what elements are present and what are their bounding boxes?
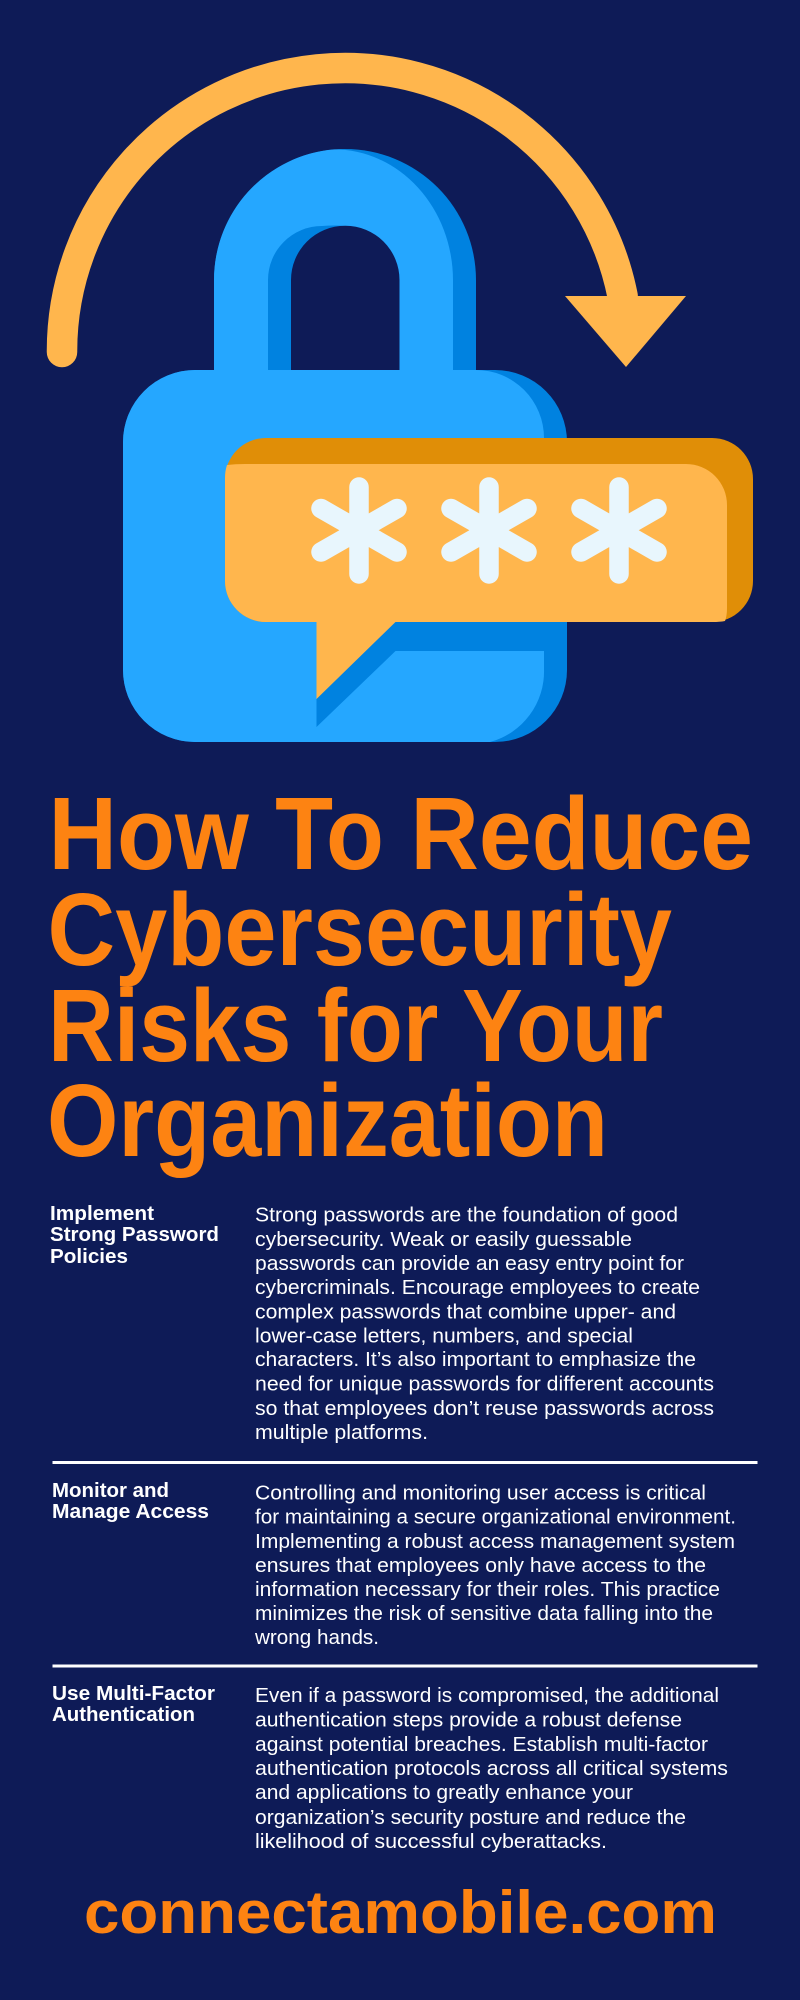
text block: multi-factor authentication: organization’s security posture and reduce the [255, 1806, 686, 1829]
text block: strong passwords: need for unique passwords for different accounts [255, 1373, 714, 1396]
text block: multi-factor authentication: and applications to greatly enhance your [255, 1781, 633, 1804]
heading: implement strong password policies: Strong Password [50, 1224, 219, 1246]
footer website: connectamobile.com [84, 1879, 717, 1946]
text block: controlling access [254, 1482, 736, 1649]
text block: multi-factor authentication: likelihood of successful cyberattacks. [255, 1830, 607, 1853]
text block: controlling access: ensures that employees only have access to the [255, 1554, 706, 1577]
text block: controlling access: Controlling and monitoring user access is critical [255, 1482, 706, 1505]
icon: password speech bubble [225, 438, 753, 699]
heading: implement strong password policies [50, 1203, 219, 1268]
text block: strong passwords: characters. It’s also important to emphasize the [255, 1348, 696, 1371]
text block: strong passwords: so that employees don’t reuse passwords across [255, 1397, 714, 1420]
text block: controlling access: Implementing a robust access management system [255, 1530, 735, 1553]
icon: padlock shackle [214, 149, 476, 372]
text block: strong passwords: cybercriminals. Encourage employees to create [255, 1276, 700, 1299]
text block: multi-factor authentication: authentication protocols across all critical systems [255, 1757, 728, 1780]
title [47, 776, 753, 1178]
text block: strong passwords: passwords can provide an easy entry point for [255, 1252, 684, 1275]
heading: use multi-factor authentication: Use Multi-Factor [52, 1683, 215, 1705]
arrow: curved arrow over padlock [62, 68, 686, 367]
text block: strong passwords: Strong passwords are the foundation of good [255, 1204, 678, 1227]
text block: controlling access: for maintaining a secure organizational environment. [255, 1506, 736, 1529]
text block: strong passwords: complex passwords that combine upper- and [255, 1300, 676, 1323]
text block: controlling access: wrong hands. [254, 1626, 379, 1649]
text block: multi-factor authentication: against potential breaches. Establish multi-factor [255, 1733, 708, 1756]
icon: padlock body [123, 370, 567, 742]
section: monitor and manage access [52, 1480, 736, 1649]
text block: multi-factor authentication [255, 1684, 728, 1853]
heading: use multi-factor authentication [52, 1683, 215, 1726]
heading: use multi-factor authentication: Authentication [52, 1704, 195, 1726]
text block: multi-factor authentication: authentication steps provide a robust defense [255, 1709, 682, 1732]
heading: monitor and manage access: Monitor and [52, 1480, 169, 1502]
heading: monitor and manage access [52, 1480, 209, 1523]
text block: strong passwords: lower-case letters, numbers, and special [255, 1324, 633, 1347]
text block: strong passwords [255, 1204, 714, 1444]
title: Cybersecurity [48, 872, 672, 987]
heading: implement strong password policies: Implement [50, 1203, 154, 1225]
title: How To Reduce [48, 776, 753, 891]
text block: multi-factor authentication: Even if a password is compromised, the additional [255, 1684, 719, 1707]
text block: controlling access: information necessary for their roles. This practice [255, 1578, 720, 1601]
title: Organization [47, 1063, 608, 1178]
text block: controlling access: minimizes the risk of sensitive data falling into the [255, 1602, 713, 1625]
text block: strong passwords: multiple platforms. [255, 1421, 428, 1444]
section: use multi-factor authentication [52, 1683, 728, 1853]
heading: monitor and manage access: Manage Access [52, 1501, 209, 1523]
icon: padlock with password bubble and arrow [62, 68, 753, 742]
heading: implement strong password policies: Policies [50, 1246, 128, 1268]
text block: strong passwords: cybersecurity. Weak or easily guessable [255, 1228, 632, 1251]
title: Risks for Your [48, 968, 663, 1083]
section: implement strong password policies [50, 1203, 714, 1444]
icon: three password asterisks [321, 487, 657, 574]
